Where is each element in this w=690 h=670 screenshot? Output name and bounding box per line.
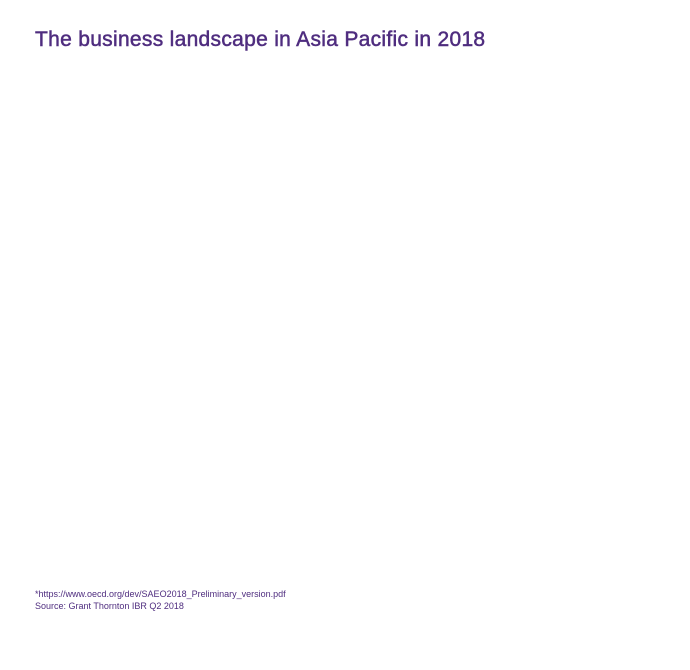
title: The business landscape in Asia Pacific in 2018 <box>35 28 485 51</box>
footnote: sources: *https://www.oecd.org/dev/SAEO2018_Preliminary_version.pdf <box>35 589 286 599</box>
footnote: sources <box>35 589 286 611</box>
footnote: sources: Source: Grant Thornton IBR Q2 2018 <box>35 601 184 611</box>
